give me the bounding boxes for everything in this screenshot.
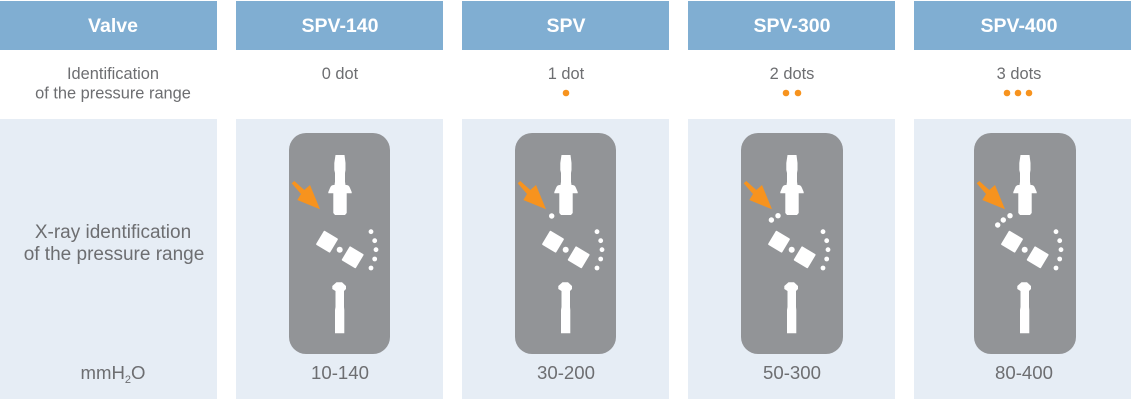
label: 3 dots: 3 dots [997,65,1041,83]
value: 50-300: 50-300 [763,362,821,383]
value: 80-400: 80-400 [995,362,1053,383]
label: identification of the pressure range: Identification [67,65,159,83]
valve squares and dots [1001,229,1063,270]
label: mmH2O: 2 [125,374,131,386]
valve bottom connector [784,282,798,333]
valve bottom connector [558,282,572,333]
label: 0 dot: 0 dot [322,65,359,83]
header: Valve: Valve [88,15,138,37]
identification dots [769,213,781,223]
identification dot [549,213,554,219]
label: identification of the pressure range [35,65,191,102]
header: SPV-140: SPV-140 [302,15,379,37]
value: 30-200: 30-200 [537,362,595,383]
label: X-ray identification of the pressure range: of the pressure range [24,244,204,265]
header: SPV [462,1,669,50]
arrow [744,181,772,209]
x-ray valve illustration [974,133,1076,354]
panel: x-ray background [462,119,669,399]
header: SPV-140 [236,1,443,50]
header: SPV-400 [914,1,1131,50]
arrow [518,181,546,209]
header: Valve [0,1,217,50]
panel: x-ray background [236,119,443,399]
column: SPV-400 [914,1,1131,399]
panel: x-ray background [914,119,1131,399]
panel: x-ray background [688,119,895,399]
valve top connector [328,155,352,215]
panel: row label background [0,119,217,399]
valve squares and dots [542,229,604,270]
indicator: 3 orange dots [1004,90,1032,96]
valve top connector [554,155,578,215]
column: SPV-300 [688,1,895,399]
indicator: 1 orange dot [563,90,569,96]
valve bottom connector [1017,282,1031,333]
x-ray valve illustration [515,133,616,354]
column: SPV [462,1,669,399]
valve bottom connector [332,282,346,333]
label: identification of the pressure range: of the pressure range [35,84,191,102]
valve top connector [1013,155,1037,215]
label: 2 dots: 2 dots [770,65,814,83]
label: mmH2O: mmH [80,362,125,383]
valve top connector [780,155,804,215]
valve squares and dots [768,229,830,270]
x-ray valve illustration [289,133,390,354]
header: SPV-300: SPV-300 [754,15,831,37]
valve squares and dots [316,229,378,270]
label: mmH2O: O [131,362,146,383]
indicator: 2 orange dots [783,90,801,96]
arrow [292,181,320,209]
header: SPV: SPV [546,15,586,37]
header: SPV-400: SPV-400 [981,15,1058,37]
identification dots [995,213,1013,228]
arrow [977,181,1005,209]
column: SPV-140 [236,1,443,399]
label: X-ray identification of the pressure range: X-ray identification [35,222,191,243]
header: SPV-300 [688,1,895,50]
x-ray valve illustration [741,133,843,354]
label: X-ray identification of the pressure range [24,222,204,265]
column: row labels [0,1,217,399]
label: 1 dot: 1 dot [548,65,585,83]
value: 10-140: 10-140 [311,362,369,383]
